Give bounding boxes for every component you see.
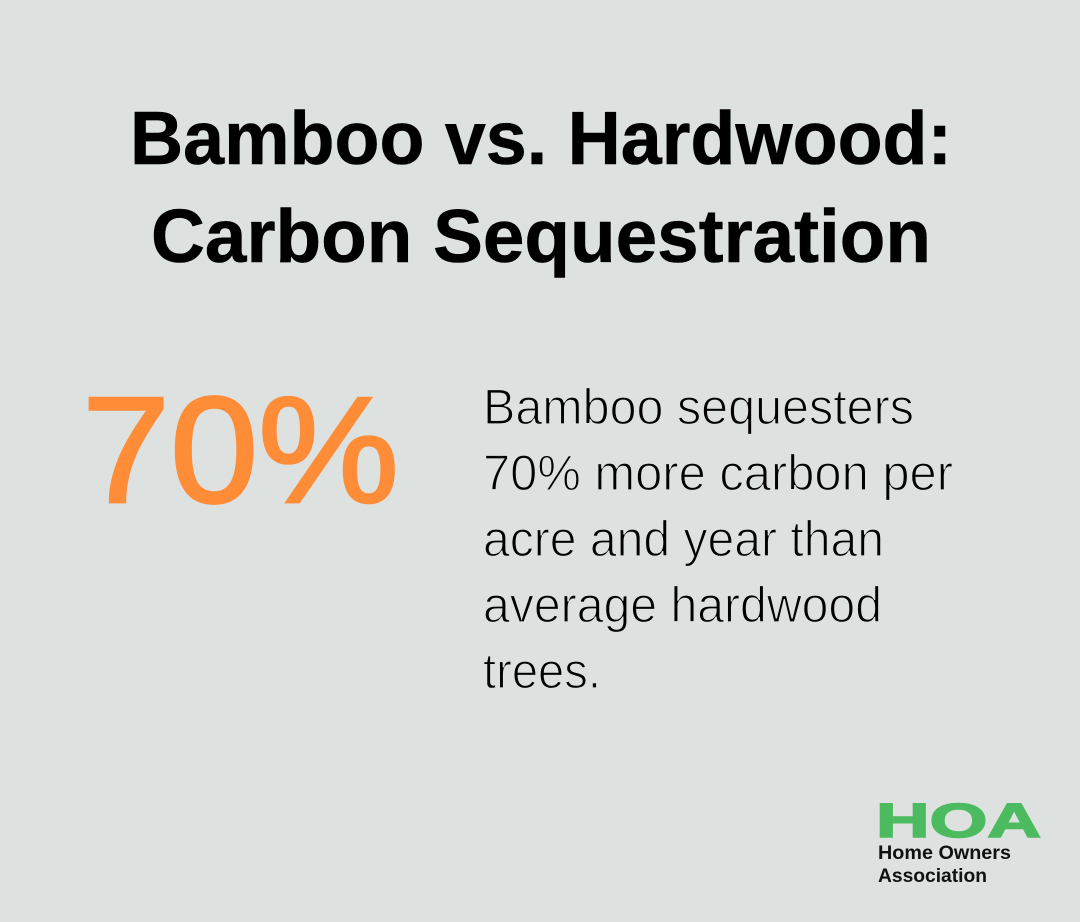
logo wordmark: Association (878, 866, 987, 887)
logo: Home Owners Association (876, 795, 1041, 887)
logo mark: HOA: HOA (876, 795, 1041, 848)
title: Carbon Sequestration (151, 194, 931, 278)
title (130, 96, 952, 278)
logo wordmark: Home Owners (878, 843, 1011, 864)
description text: Bamboo sequesters (483, 379, 914, 435)
description text: trees. (483, 643, 601, 699)
description text (483, 379, 953, 699)
big stat: 70%: 70% (82, 365, 399, 534)
description text: 70% more carbon per (483, 445, 953, 501)
description text: average hardwood (483, 577, 882, 633)
description text: acre and year than (483, 511, 884, 567)
title: Bamboo vs. Hardwood: (130, 96, 952, 180)
logo wordmark (878, 843, 1011, 887)
